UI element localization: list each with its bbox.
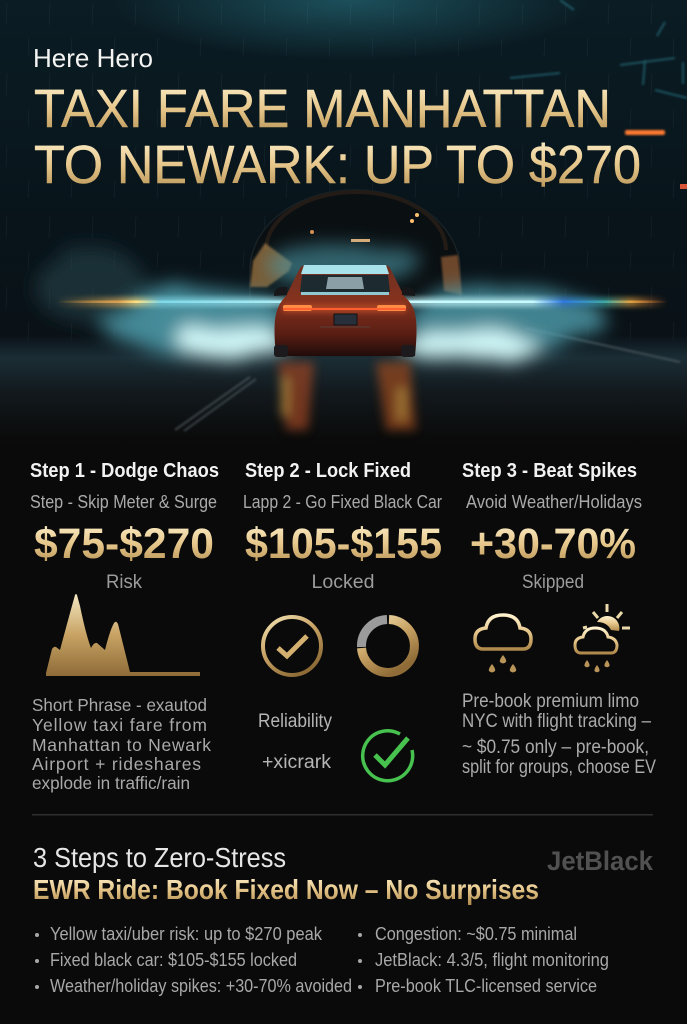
step 1 heading: Step 1 - Dodge Chaos <box>30 460 219 482</box>
step 2 label: Locked <box>312 572 374 593</box>
bullet list right: Congestion: ~$0.75 minimal <box>375 924 577 944</box>
title: TO NEWARK: UP TO $270 <box>34 135 641 195</box>
step 2 subheading: Lapp 2 - Go Fixed Black Car <box>243 492 442 512</box>
chart: reliability donut <box>361 620 414 672</box>
step 1 description: Airport + rideshares <box>32 754 201 774</box>
step 3 heading: Step 3 - Beat Spikes <box>462 460 637 482</box>
chart: fare spikes area <box>46 594 200 676</box>
bullet list right <box>358 924 609 996</box>
panel: step 2 <box>243 460 442 781</box>
panel: step 3 <box>462 460 656 778</box>
icon: sun and rain cloud <box>575 604 630 672</box>
step 3 description: split for groups, choose EV <box>462 757 656 778</box>
step 2 value: $105-$155 <box>245 520 442 568</box>
light streak <box>57 297 667 307</box>
closing panel <box>33 842 654 996</box>
step 3 description: NYC with flight tracking – <box>462 711 651 732</box>
step 1 description: Yellow taxi fare from <box>32 715 207 735</box>
exchange label: +xicrark <box>262 752 332 773</box>
hero illustration: car in rainy tunnel <box>0 0 687 450</box>
icon: rain cloud <box>475 615 531 672</box>
step 1 label: Risk <box>106 572 142 593</box>
title <box>34 79 641 195</box>
step 3 description: Pre-book premium limo <box>462 691 639 712</box>
step 1 description <box>32 695 211 793</box>
reliability label: Reliability <box>258 711 332 732</box>
icon: gold check circle <box>263 617 321 675</box>
step 2 heading: Step 2 - Lock Fixed <box>245 460 411 482</box>
title: TAXI FARE MANHATTAN <box>34 79 611 139</box>
step 1 description: Short Phrase - exautod <box>32 695 207 715</box>
step 3 subheading: Avoid Weather/Holidays <box>466 492 642 512</box>
bullet list left: Yellow taxi/uber risk: up to $270 peak <box>50 924 323 944</box>
bullet list right: JetBlack: 4.3/5, flight monitoring <box>375 950 609 970</box>
road <box>0 335 687 440</box>
road markings <box>175 328 680 431</box>
hero kicker: Here Hero <box>33 43 153 73</box>
call to action: EWR Ride: Book Fixed Now – No Surprises <box>33 874 539 905</box>
bullet list left: Weather/holiday spikes: +30-70% avoided <box>50 976 352 996</box>
step 1 description: Manhattan to Newark <box>32 735 211 755</box>
mist <box>35 243 605 359</box>
bullet list left: Fixed black car: $105-$155 locked <box>50 950 297 970</box>
icon: green check <box>363 731 413 781</box>
step 1 subheading: Step - Skip Meter & Surge <box>30 492 217 512</box>
step 1 description: explode in traffic/rain <box>32 773 190 793</box>
car <box>274 265 416 357</box>
brand logo text: JetBlack <box>547 846 654 876</box>
panel: step 1 <box>30 460 219 793</box>
step 3 label: Skipped <box>522 572 584 593</box>
bullet list right: Pre-book TLC-licensed service <box>375 976 597 996</box>
wet road reflections <box>278 362 416 430</box>
step 3 description: ~ $0.75 only – pre-book, <box>462 737 649 758</box>
tunnel arch <box>250 190 462 300</box>
step 3 description <box>462 691 656 778</box>
closing heading: 3 Steps to Zero-Stress <box>33 842 286 873</box>
step 3 value: +30-70% <box>470 520 636 568</box>
step 1 value: $75-$270 <box>34 520 214 568</box>
bullet list left <box>35 924 352 996</box>
